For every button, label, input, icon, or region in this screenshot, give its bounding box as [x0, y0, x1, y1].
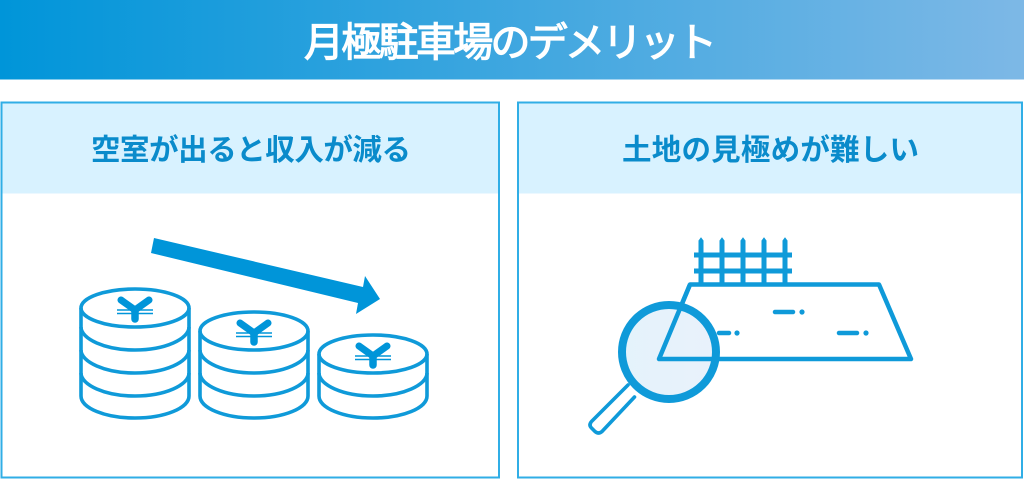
panel: vacancy reduces income	[2, 102, 499, 478]
panel: hard to assess land	[518, 102, 1022, 478]
icon: middle coin stack	[200, 312, 308, 418]
icon: land plot outline	[659, 284, 911, 359]
icon: plot markings	[719, 309, 869, 336]
title bar	[0, 0, 1024, 80]
heading: land: 土地の見極めが難しい	[622, 133, 919, 167]
arrow: declining income	[151, 238, 380, 314]
title: 月極駐車場のデメリット	[304, 21, 717, 65]
icon: tall coin stack	[81, 289, 189, 418]
icon: land plot with fence under magnifier	[590, 238, 911, 433]
icon: fence	[694, 238, 792, 285]
icon: short coin stack	[319, 335, 427, 418]
heading: vacancy: 空室が出ると収入が減る	[91, 133, 411, 167]
panel header: land	[519, 104, 1021, 194]
panel header: vacancy	[2, 104, 498, 194]
icon: magnifying glass	[590, 284, 718, 433]
